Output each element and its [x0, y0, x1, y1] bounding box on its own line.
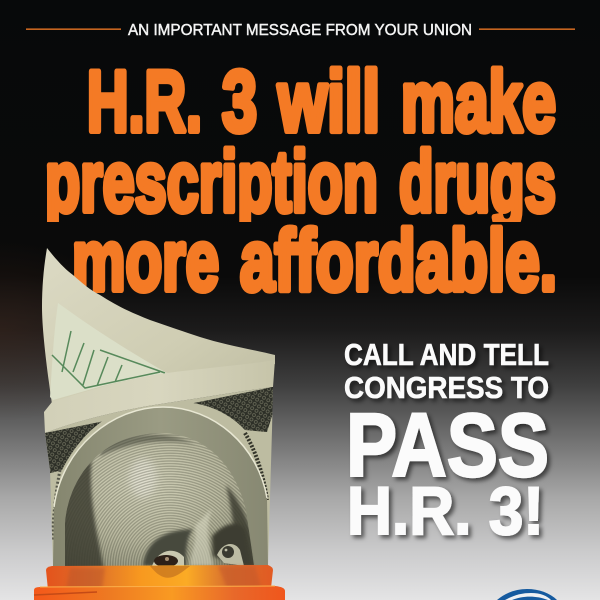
- upper ring: [46, 565, 273, 590]
- rolled dollar bill: [42, 248, 275, 570]
- left brow and eye: [143, 529, 193, 567]
- headline: H.R.: [87, 54, 202, 150]
- headline: prescription: [45, 134, 378, 230]
- pill bottle cap: [34, 565, 285, 600]
- lower ring: [34, 586, 285, 600]
- union logo: [497, 589, 557, 600]
- call to action: H.R. 3!: [347, 473, 544, 549]
- portrait oval: [53, 407, 268, 566]
- headline: more: [72, 213, 219, 309]
- bill back flap: [42, 248, 275, 404]
- call to action: [344, 338, 549, 549]
- bill front band: [44, 360, 275, 433]
- top banner: important message: AN IMPORTANT MESSAGE FROM YOUR UNION: [128, 22, 472, 39]
- headline: will: [277, 54, 380, 150]
- right brow and eye: [212, 524, 252, 566]
- portrait: face and hair: [65, 433, 254, 566]
- bill front face: [45, 387, 273, 566]
- nose: [190, 508, 214, 566]
- ornate border strip: [45, 387, 273, 540]
- call to action: CALL AND TELL: [344, 338, 549, 372]
- headline: [46, 66, 556, 294]
- headline: 3: [222, 54, 257, 150]
- call to action: PASS: [346, 396, 549, 496]
- call to action: CONGRESS TO: [344, 371, 549, 405]
